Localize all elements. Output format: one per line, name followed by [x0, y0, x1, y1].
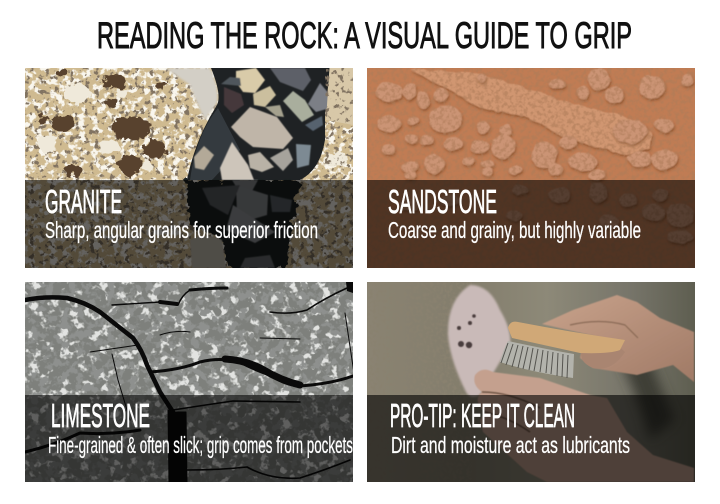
sandstone heading: SANDSTONE [388, 183, 497, 220]
granite description: Sharp, angular grains for superior friction [45, 217, 318, 243]
brush [500, 322, 625, 378]
rocks [194, 68, 330, 180]
ridge [410, 70, 652, 155]
pebbles [375, 68, 694, 244]
panel: limestone [25, 282, 358, 482]
lower hand [474, 370, 694, 482]
climbing hold [448, 285, 510, 397]
upper hand [542, 295, 694, 382]
granite heading: GRANITE [45, 183, 122, 220]
sandstone caption band [367, 180, 695, 268]
lower dark rock area [187, 180, 300, 268]
cracks [25, 288, 358, 482]
panel: granite [25, 60, 353, 268]
pro-tip caption band [367, 395, 695, 482]
limestone description: Fine-grained & often slick; grip comes from pockets [48, 432, 353, 458]
limestone caption band [25, 395, 353, 482]
dark rock wedge [187, 68, 330, 180]
pale slab edge [165, 68, 218, 120]
lower rocks [190, 180, 292, 268]
limestone heading: LIMESTONE [51, 397, 150, 434]
panel: sandstone [367, 68, 695, 268]
panel: pro-tip [367, 282, 695, 482]
granite caption band [25, 180, 353, 268]
